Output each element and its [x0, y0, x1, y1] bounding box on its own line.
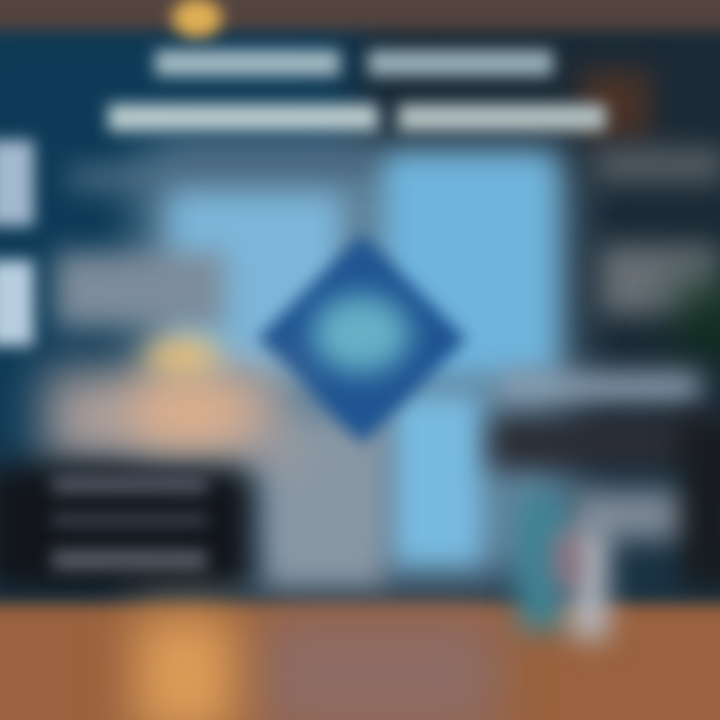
right lower grey panel [570, 490, 700, 540]
floor [0, 604, 720, 720]
panel: lower right light blue [392, 395, 482, 565]
background wall [0, 20, 380, 460]
right grey bars [595, 148, 720, 182]
right lower dark panel [490, 415, 720, 470]
peach glow [125, 375, 255, 445]
right bottom dark corner [680, 420, 720, 590]
bottle accent [558, 535, 576, 585]
sofa text lines [52, 474, 207, 494]
title line 1 [155, 50, 340, 76]
panel: centre right light blue [385, 155, 555, 375]
lamp glow [145, 338, 220, 374]
right lower grey-blue band [500, 372, 700, 404]
right plant [680, 280, 720, 360]
diamond inner circle [312, 295, 410, 373]
floor left glow [135, 615, 235, 720]
left lower grey area [45, 370, 285, 465]
left grey block [55, 252, 225, 328]
floor centre tint [260, 615, 500, 720]
subtitle band [70, 168, 160, 188]
ceiling lamp glow [172, 0, 222, 38]
diamond icon [257, 234, 467, 444]
left white card upper [0, 140, 34, 226]
left white card lower [0, 260, 34, 346]
panel: lower centre grey [265, 420, 385, 585]
title line 2 [108, 104, 378, 131]
bottle body [518, 495, 564, 630]
poster background [140, 150, 570, 580]
bottle highlight [572, 530, 608, 640]
dark sofa box [0, 466, 254, 590]
top ceiling strip [0, 0, 720, 30]
panel: centre left light blue [170, 195, 340, 375]
